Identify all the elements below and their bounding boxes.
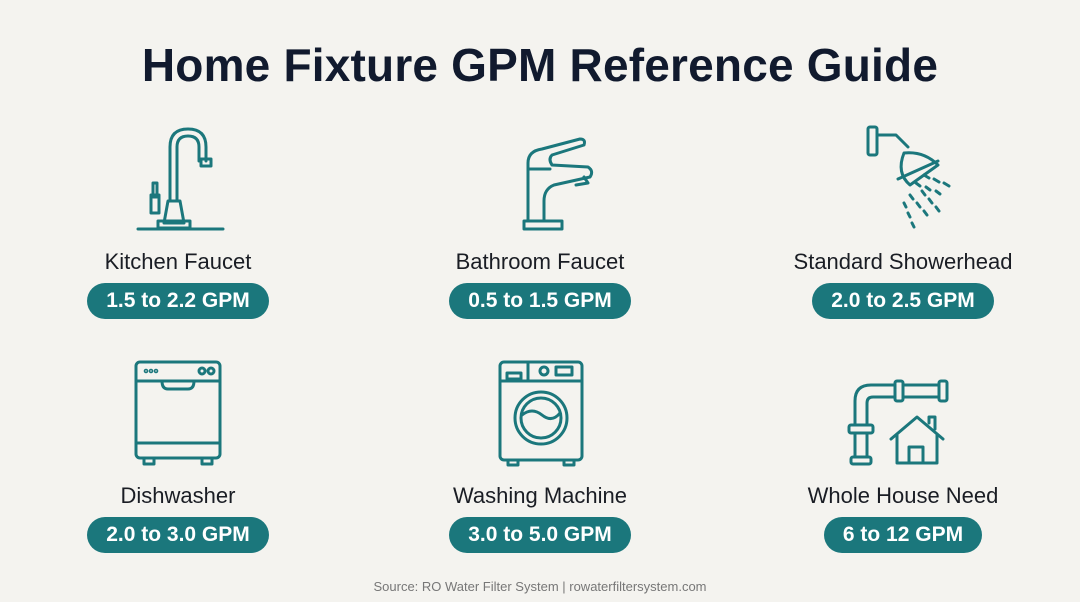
title: Home Fixture GPM Reference Guide — [142, 39, 938, 91]
pill value: 3.0 to 5.0 GPM — [468, 523, 612, 546]
panel: bathroom faucet — [449, 138, 631, 319]
pill value: 6 to 12 GPM — [843, 523, 963, 546]
pill value — [449, 517, 631, 553]
pill value — [87, 517, 269, 553]
pill value — [812, 283, 994, 319]
icon: bathroom faucet — [522, 138, 594, 230]
pill value: 2.0 to 2.5 GPM — [831, 289, 975, 312]
pill value: 2.0 to 3.0 GPM — [106, 523, 250, 546]
panel: dishwasher — [87, 360, 269, 553]
icon: pipe and house — [848, 380, 948, 466]
panel: kitchen faucet — [87, 128, 269, 319]
icon: showerhead — [866, 126, 951, 229]
panel: washing machine — [449, 360, 631, 553]
pill value: 1.5 to 2.2 GPM — [106, 289, 250, 312]
panel: whole house — [808, 380, 998, 553]
source: Source: RO Water Filter System | rowaterfiltersystem.com — [373, 579, 707, 594]
label: Bathroom Faucet — [456, 249, 624, 274]
icon: dishwasher — [134, 360, 222, 466]
label: Whole House Need — [808, 483, 998, 508]
pill value — [824, 517, 982, 553]
label: Washing Machine — [453, 483, 627, 508]
pill value — [87, 283, 269, 319]
pill value: 0.5 to 1.5 GPM — [468, 289, 612, 312]
icon: washing machine — [498, 360, 584, 466]
pill value — [449, 283, 631, 319]
label: Dishwasher — [121, 483, 235, 508]
icon: kitchen faucet — [136, 128, 224, 230]
label: Standard Showerhead — [794, 249, 1012, 274]
label: Kitchen Faucet — [105, 249, 251, 274]
panel: showerhead — [794, 126, 1012, 319]
